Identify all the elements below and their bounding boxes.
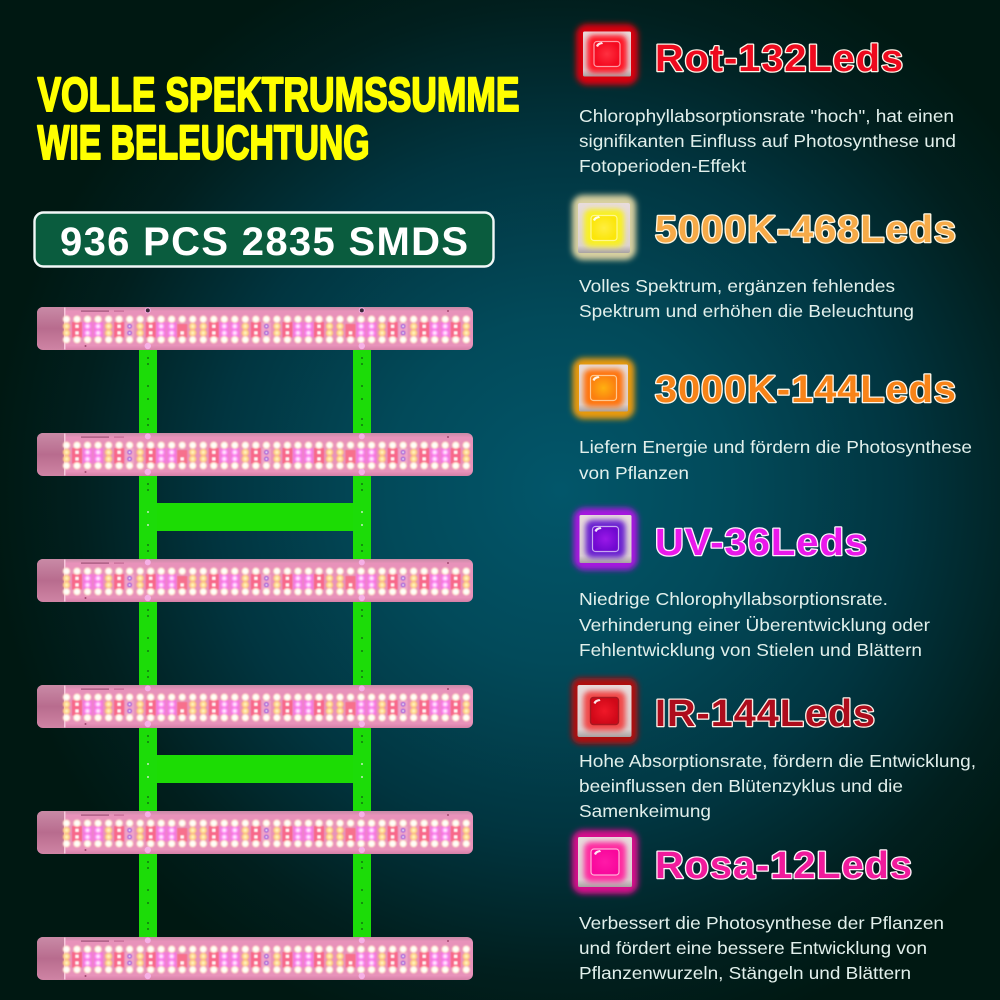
light bar 5 (37, 811, 473, 854)
description: Liefern Energie und fördern die Photosynthese (579, 437, 972, 457)
description: von Pflanzen (579, 463, 689, 483)
icon: red LED (576, 24, 638, 85)
description: Pflanzenwurzeln, Stängeln und Blättern (579, 963, 911, 983)
mounting holes on bar 1 (146, 308, 364, 312)
icon: orange LED (572, 358, 634, 419)
description (579, 276, 914, 321)
heading: UV-36Leds (655, 522, 868, 564)
heading: IR-144Leds (655, 693, 876, 735)
description: Fehlentwicklung von Stielen und Blättern (579, 640, 922, 660)
description: Hohe Absorptionsrate, fördern die Entwicklung, (579, 751, 976, 771)
description: Verhinderung einer Überentwicklung oder (579, 615, 930, 635)
title (38, 69, 520, 170)
light bar 6 (37, 937, 473, 980)
description: und fördert eine bessere Entwicklung von (579, 938, 927, 958)
description: Samenkeimung (579, 801, 711, 821)
heading: Rot-132Leds (655, 38, 904, 80)
light fixture (37, 307, 473, 980)
description (579, 751, 976, 821)
icon: yellow LED (572, 195, 636, 260)
green rails and cross bars (139, 345, 371, 940)
description (579, 106, 956, 176)
description: Fotoperioden-Effekt (579, 156, 746, 176)
light bar 2 (37, 433, 473, 476)
heading: 3000K-144Leds (655, 369, 957, 411)
icon: purple LED (574, 508, 638, 570)
description: signifikanten Einfluss auf Photosynthese und (579, 131, 956, 151)
description (579, 589, 930, 660)
description: Spektrum und erhöhen die Beleuchtung (579, 301, 914, 321)
heading: Rosa-12Leds (655, 845, 913, 887)
heading: 5000K-468Leds (655, 209, 957, 251)
light bar 4 (37, 685, 473, 728)
description: beeinflussen den Blütenzyklus und die (579, 776, 903, 796)
light bar 1 (37, 307, 473, 350)
description: Niedrige Chlorophyllabsorptionsrate. (579, 589, 888, 609)
panel: IR (572, 678, 976, 821)
description: Chlorophyllabsorptionsrate "hoch", hat einen (579, 106, 954, 126)
panel: 5000K (572, 195, 957, 321)
panel: Rot (576, 24, 956, 176)
panel: UV (574, 508, 930, 660)
panel: 3000K (572, 358, 972, 483)
panel: Rosa (572, 830, 944, 983)
icon: pink LED (572, 830, 638, 894)
description (579, 913, 944, 983)
icon: infrared LED (572, 678, 638, 744)
title: VOLLE SPEKTRUMSSUMME (38, 69, 520, 122)
description (579, 437, 972, 483)
description: Volles Spektrum, ergänzen fehlendes (579, 276, 895, 296)
badge: 936 PCS 2835 SMDS: 936 PCS 2835 SMDS (60, 220, 468, 264)
description: Verbessert die Photosynthese der Pflanzen (579, 913, 944, 933)
light bar 3 (37, 559, 473, 602)
title: WIE BELEUCHTUNG (38, 117, 370, 170)
